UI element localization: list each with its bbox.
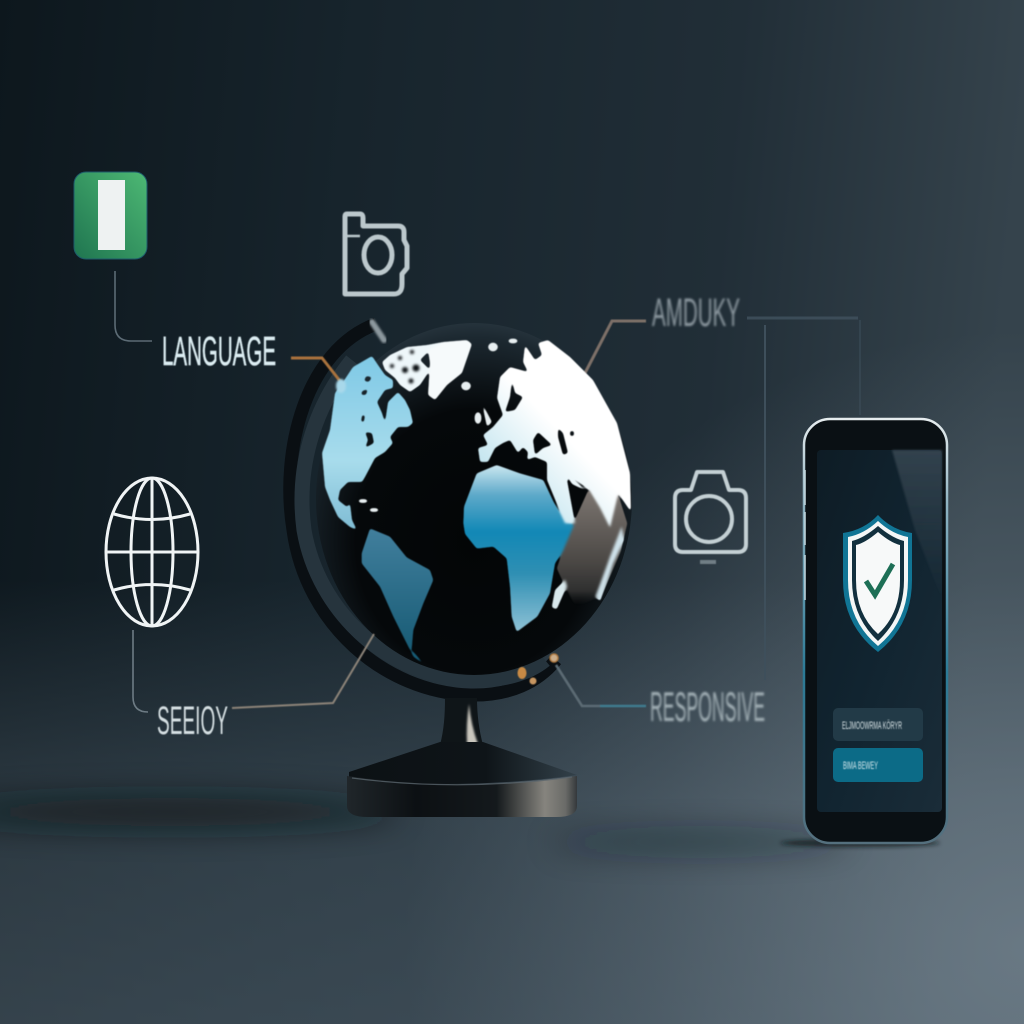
greenland <box>428 340 472 400</box>
label: top right: AMDUKY <box>652 291 740 335</box>
indonesia streak <box>596 527 624 602</box>
cone <box>349 742 577 784</box>
button: dark <box>833 708 923 741</box>
asia shaded region <box>557 490 627 612</box>
stand neck <box>440 698 483 745</box>
shield <box>843 515 912 652</box>
icon: camera right <box>675 472 746 562</box>
small islands <box>358 338 518 512</box>
globe stand ring <box>290 322 556 695</box>
text: SEEIOY <box>157 699 228 743</box>
side buttons <box>804 470 806 600</box>
connector: flag to language <box>115 271 152 341</box>
connector: ring to responsive <box>556 665 646 706</box>
text: RESPONSIVE <box>650 683 765 730</box>
button: dark: ELJMOOWRMA KÖRYR <box>842 720 902 732</box>
phone shadow <box>780 839 940 847</box>
continents <box>322 338 631 667</box>
eurasia <box>478 340 631 527</box>
globe sphere <box>316 323 632 675</box>
button: teal: BIMA BEWEY <box>843 760 878 772</box>
globe stand base <box>347 698 577 817</box>
connector: language to globe <box>291 358 340 381</box>
button: teal <box>833 748 923 782</box>
arctic specks <box>390 350 420 384</box>
phone screen <box>817 450 942 812</box>
globe pin: language <box>336 379 346 393</box>
globe <box>316 323 632 675</box>
connector: top label to phone <box>747 318 860 680</box>
icon: camera top <box>345 214 407 294</box>
connector: top label to globe <box>585 321 646 373</box>
madagascar <box>552 580 567 609</box>
north america <box>322 356 413 530</box>
icon: green flag tile <box>74 172 147 259</box>
globe ring studs <box>518 654 558 684</box>
screen reflection <box>892 450 942 600</box>
icon: wireframe globe <box>106 478 198 626</box>
connector: bottom left label to globe <box>232 634 374 708</box>
connector: wireframe globe to label <box>133 630 148 712</box>
phone body <box>804 419 947 843</box>
africa <box>463 465 574 632</box>
label: language: LANGUAGE <box>162 328 276 374</box>
base band <box>347 776 577 817</box>
checkmark <box>866 564 893 595</box>
phone <box>780 419 947 847</box>
south america <box>362 528 433 667</box>
connector: camera to globe <box>622 524 655 528</box>
arctic islands <box>382 342 443 392</box>
